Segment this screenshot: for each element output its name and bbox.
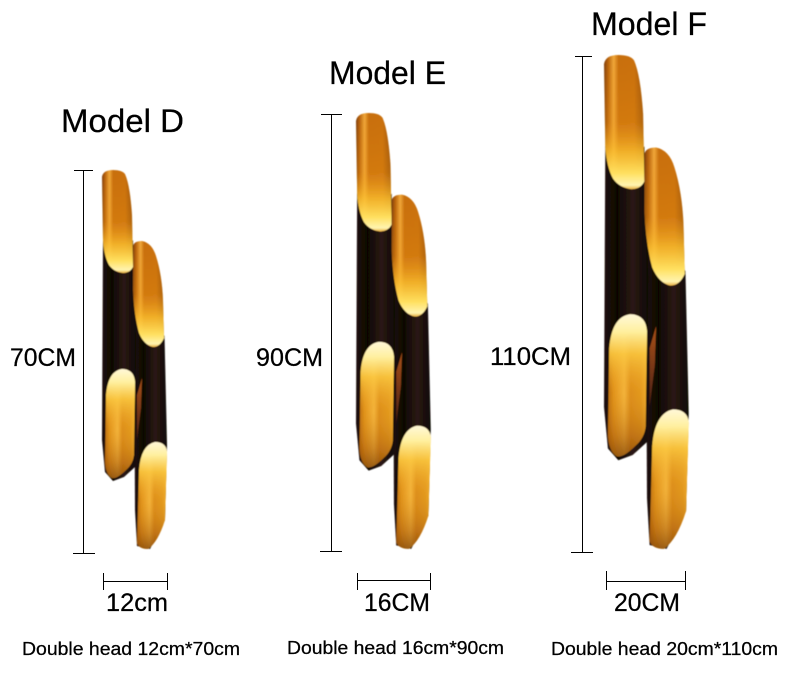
caption: Model D: Double head 12cm*70cm [22, 639, 240, 659]
title: Model D: Model D [61, 103, 184, 139]
title: Model E: Model E [329, 55, 446, 91]
width label: Model E: 16CM [364, 589, 430, 617]
title: Model F: Model F [591, 6, 707, 42]
lamp: Model E [356, 113, 431, 549]
height label: Model E: 90CM [256, 344, 323, 372]
height label: Model D: 70CM [10, 344, 76, 372]
caption: Model E: Double head 16cm*90cm [287, 638, 504, 658]
width dimension: Model D [103, 573, 168, 590]
lamp: Model F [604, 55, 689, 549]
width label: Model F: 20CM [614, 589, 680, 617]
height label: Model F: 110CM [490, 343, 571, 371]
caption: Model F: Double head 20cm*110cm [551, 639, 778, 659]
height dimension: Model E [320, 114, 342, 552]
width dimension: Model F [606, 571, 686, 590]
height dimension: Model F [571, 56, 593, 552]
height dimension: Model D [73, 170, 95, 554]
lamp: Model D [102, 170, 167, 549]
width dimension: Model E [357, 573, 431, 590]
width label: Model D: 12cm [106, 589, 168, 617]
